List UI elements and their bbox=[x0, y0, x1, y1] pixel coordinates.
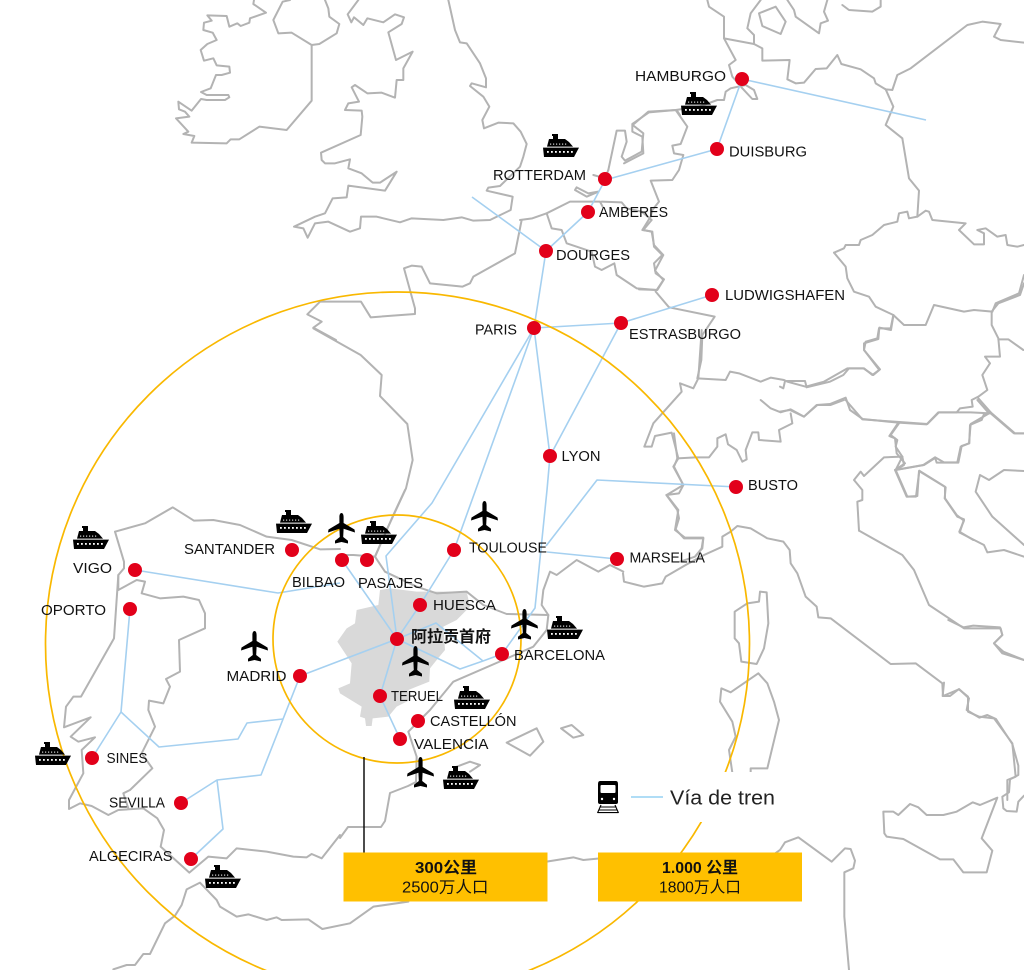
map: Aragon region bbox=[337, 588, 470, 726]
callout: 1000 km: 1.000 公里 bbox=[662, 860, 738, 877]
city labels: VALENCIA bbox=[414, 736, 488, 753]
ship icons bbox=[35, 92, 717, 888]
city labels: BARCELONA bbox=[514, 647, 605, 664]
map: Great Britain and north France bbox=[294, 0, 680, 340]
callout: 300 km bbox=[344, 852, 548, 902]
map: North Africa coast bbox=[113, 857, 610, 969]
city markers bbox=[85, 72, 749, 866]
city labels: LUDWIGSHAFEN bbox=[725, 287, 845, 304]
city labels: OPORTO bbox=[41, 602, 106, 619]
icon: train bbox=[598, 781, 618, 813]
legend: rail line bbox=[598, 781, 775, 813]
map: France west coast bbox=[313, 328, 703, 562]
city labels: ROTTERDAM bbox=[493, 167, 586, 184]
callout: 300 km: 2500万人口 bbox=[402, 878, 488, 896]
callout: 300 km: 300公里 bbox=[415, 860, 477, 877]
city labels: TOULOUSE bbox=[469, 540, 547, 556]
city labels: PASAJES bbox=[358, 575, 423, 592]
1000 km radius circle bbox=[46, 292, 750, 970]
map: Spain north and east coast bbox=[340, 490, 623, 838]
300 km radius circle bbox=[273, 515, 521, 763]
city labels: AMBERES bbox=[599, 204, 668, 221]
leader line to 300 km box bbox=[363, 757, 365, 853]
city labels: 阿拉贡首府 bbox=[411, 627, 491, 646]
legend label: Vía de tren bbox=[670, 788, 775, 810]
city labels: VIGO bbox=[73, 560, 112, 577]
rail network lines bbox=[92, 79, 926, 859]
city labels: DUISBURG bbox=[729, 144, 807, 160]
city labels: HUESCA bbox=[433, 597, 496, 614]
city labels: PARIS bbox=[475, 322, 517, 338]
city labels: ALGECIRAS bbox=[89, 848, 172, 865]
city labels: DOURGES bbox=[556, 247, 630, 264]
map: Iberian peninsula bbox=[64, 507, 340, 873]
callout: 1000 km bbox=[598, 852, 802, 902]
city labels: BILBAO bbox=[292, 574, 345, 591]
map: Austria, Balkans bbox=[780, 283, 1024, 540]
map: Italy, Corsica, Sardinia bbox=[623, 400, 1024, 800]
city labels: SANTANDER bbox=[184, 541, 275, 558]
city labels: BUSTO bbox=[748, 477, 798, 494]
map: Germany, Denmark, Czechia bbox=[624, 0, 1024, 387]
city labels: SEVILLA bbox=[109, 794, 165, 812]
city labels: MADRID bbox=[226, 668, 287, 685]
city labels: CASTELLÓN bbox=[430, 713, 516, 730]
legend line sample bbox=[631, 796, 663, 798]
city labels: SINES bbox=[106, 750, 148, 767]
map: south Italy, Sicily, Tunisia bbox=[740, 620, 1024, 970]
callout: 1000 km: 1800万人口 bbox=[659, 878, 741, 896]
legend background bbox=[590, 772, 805, 822]
city labels: HAMBURGO bbox=[635, 68, 726, 85]
city labels: MARSELLA bbox=[630, 550, 705, 566]
city labels bbox=[41, 68, 845, 865]
city labels: LYON bbox=[562, 448, 600, 465]
plane icons bbox=[241, 501, 538, 788]
city labels: ESTRASBURGO bbox=[629, 326, 741, 343]
city labels: TERUEL bbox=[391, 688, 443, 705]
map: Ireland and Britain bbox=[176, 0, 339, 143]
